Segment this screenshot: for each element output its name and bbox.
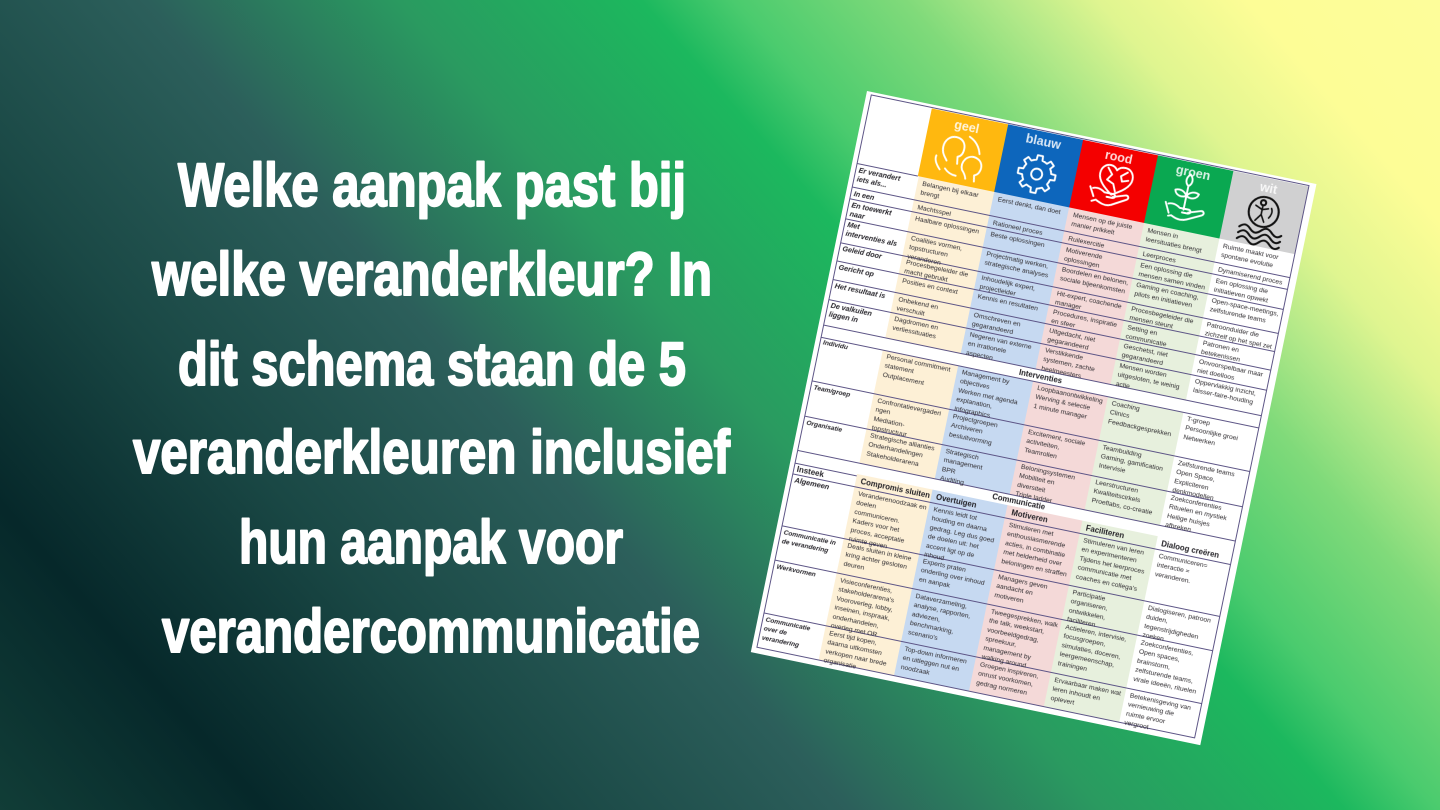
column: rood: spreekuur, (985, 636, 1017, 649)
row labels: Gericht op (838, 263, 875, 279)
column: groen: Feedbackgesprekken (1107, 418, 1172, 438)
column: rood: diversiteit (1017, 482, 1046, 494)
column: rood: onrust voorkomen, (977, 670, 1034, 689)
column: blauw: Omschreven en (973, 312, 1021, 328)
column: rood: Tweegesprekken, walk (990, 609, 1059, 629)
column: groen: Intervisie (1098, 462, 1126, 475)
column: blauw: Strategisch (945, 448, 979, 462)
column: geel (823, 181, 992, 678)
column: blauw: scenario's (907, 629, 939, 642)
column: rood: enthousiasmerende (1006, 531, 1066, 550)
column: rood: Werving & selectie (1035, 394, 1091, 412)
column: wit: Zoekconferenties, (1140, 640, 1194, 657)
column: wit: zelfsturende teams, (1134, 667, 1194, 685)
column: geel: overleg met OR (830, 622, 878, 639)
icon: heart on hand (1087, 162, 1135, 209)
column: blauw: Rationeel proces (992, 220, 1044, 237)
column: geel: Deals sluiten in kleine (847, 543, 912, 563)
column: wit: zelfsturende teams (1209, 306, 1267, 325)
column: rood: Hit-expert, coachende (1056, 290, 1122, 311)
column: geel: Outplacement (882, 372, 925, 387)
column: geel: Eerst tijd kopen, (828, 630, 877, 647)
column: geel: daarna uitkomsten (827, 639, 883, 657)
column: groen: Een oplossing die (1140, 262, 1193, 280)
column: groen: gegarandeerd (1121, 352, 1164, 367)
column: rood: Procedures, inspiratie (1052, 309, 1118, 329)
column: groen: Faciliteren (1085, 524, 1125, 540)
column: wit: spontane evolutie (1220, 252, 1274, 270)
column: geel: Compromis sluiten (860, 477, 931, 500)
row labels: In een (853, 189, 876, 202)
title: dit schema staan de 5 (178, 330, 686, 398)
column: groen: communicatie met (1077, 564, 1132, 582)
column: geel: ruimte geven (848, 536, 888, 550)
row labels: liggen in (828, 310, 859, 325)
column: rood: aandacht en (996, 583, 1034, 597)
column: rood: manier prikkelt (1070, 221, 1115, 237)
column: rood: motiveren (994, 592, 1024, 605)
column: rood: Uitgedacht, niet (1048, 327, 1096, 344)
column: blauw: Projectgroepen (952, 413, 998, 429)
column: blauw: explanation, (956, 396, 993, 410)
column: geel: Kaders voor het (852, 518, 900, 534)
column: rood: systemen, zachte (1043, 356, 1096, 374)
column: groen: communicatie (1125, 333, 1167, 349)
column: rood: oplossingen (1063, 256, 1100, 270)
column: groen: ontwikkelen, (1068, 607, 1106, 622)
column: geel: Onbekend en (898, 296, 939, 311)
column: blauw: houding en daarna (931, 515, 988, 534)
column: groen: focusgroepen, (1063, 633, 1106, 649)
row labels: iets als... (856, 175, 888, 190)
column: groen: trainingen (1057, 660, 1088, 673)
column: blauw: onderling over inhoud (920, 567, 985, 587)
column: wit: Open-space-meetings, (1211, 297, 1279, 318)
column: groen: Ervaarbaar maken wat (1054, 677, 1122, 697)
panel: colour header row: geel (953, 118, 980, 136)
column: wit: Patroonduider die (1206, 321, 1260, 339)
column: rood: Ruilexercitie (1067, 235, 1105, 250)
column: rood: acties, in combinatie (1004, 540, 1066, 559)
column: geel: inseinen, inspraak, (834, 604, 890, 623)
title: veranderkleuren inclusief (133, 418, 731, 486)
column: groen: Leerproces (1142, 251, 1177, 265)
column: geel: verkopen naar brede (825, 648, 887, 668)
title (133, 151, 731, 665)
column: geel: organisatie (823, 657, 857, 671)
column: blauw: Eerst denkt, dan doet (997, 196, 1061, 216)
column: rood: gegarandeerd (1047, 337, 1089, 352)
column: wit: Heilige huisjes (1166, 513, 1211, 528)
column: groen: en experimenteren (1081, 546, 1137, 565)
icon: two heads (932, 131, 987, 182)
column: rood: walking around (980, 653, 1027, 670)
column: blauw (900, 196, 1063, 684)
column: wit: Netwerken (1183, 434, 1216, 447)
column: geel: veranderen (907, 253, 942, 267)
column: rood: Groepen inspireren, (979, 661, 1039, 680)
column: wit: Open spaces, (1138, 649, 1181, 664)
icon: gear (1014, 152, 1059, 196)
column: rood: en sfeer (1050, 318, 1076, 330)
column: blauw: en aanpak (918, 576, 951, 590)
title: Welke aanpak past bij (178, 151, 686, 219)
column: rood: Motiveren (1011, 508, 1049, 524)
column backgrounds (819, 175, 1220, 722)
column: wit: Zelfsturende teams (1177, 460, 1235, 478)
column: wit: Persoonlijke groei (1185, 425, 1239, 443)
column: groen: Leerstructuren (1095, 479, 1139, 495)
row labels: Met (847, 220, 861, 231)
column: blauw: management (943, 457, 983, 472)
column: blauw: Kennis leidt tot (933, 506, 978, 522)
row labels: verandering (761, 635, 800, 649)
column: geel: proces, acceptatie (850, 527, 905, 545)
column: groen: Participatie (1072, 589, 1106, 603)
row labels: Communicatie in (783, 529, 836, 547)
column: groen: Coaching (1111, 400, 1140, 413)
column: wit: zichzelf op het spel zet (1204, 330, 1272, 351)
column: blauw: noodzaak (900, 664, 931, 677)
column: geel: stakeholderarena's (838, 586, 895, 605)
panel: colour header row: wit (1258, 180, 1279, 197)
column: geel: Strategische allianties (869, 432, 935, 453)
column: rood: Excitement, sociale (1027, 429, 1086, 447)
column: rood: gedrag normeren (976, 679, 1028, 697)
heading: Interventies: Interventies (1018, 368, 1064, 386)
row labels: Er verandert (858, 166, 901, 183)
icon: plant on hand (1163, 171, 1211, 224)
column: groen: coaches en collega's (1075, 573, 1138, 593)
column: geel: Procesbegeleider die (905, 259, 969, 279)
column: wit: Dynamiserend proces (1217, 266, 1284, 287)
column: groen: uitgesloten, te weinig (1117, 371, 1180, 391)
column: wit: virale ideeën, rituelen (1133, 676, 1197, 696)
column: groen: simulaties, doceren, (1061, 642, 1121, 661)
column: blauw: gedrag. Leg dus goed (929, 524, 995, 544)
column: rood: Beloningsystemen (1020, 464, 1076, 482)
column: blauw: Negeren van externe (969, 331, 1032, 351)
column: rood: sociale bijeenkomsten (1059, 275, 1126, 296)
column: blauw: infographics (954, 405, 991, 420)
column: wit: Ruimte maakt voor (1222, 243, 1279, 261)
column: blauw: Beste oplossingen (990, 231, 1045, 249)
row labels: Het resultaat is (834, 281, 886, 300)
column: groen: Kwaliteitscirkels (1093, 488, 1141, 505)
column: blauw: aspecten (965, 349, 994, 362)
column: geel: Haalbare oplossingen (914, 215, 980, 236)
column: rood: voorbeeldgedrag, (986, 627, 1039, 644)
column: wit: betekenissen (1200, 349, 1241, 364)
column: groen: Setting en (1127, 324, 1158, 337)
column: rood: Teamrollen (1024, 447, 1058, 460)
column: groen: Procesbegeleider die (1131, 306, 1194, 325)
column: wit: brainstorm, (1136, 658, 1171, 671)
column: rood: Triple ladder (1015, 491, 1053, 505)
column: rood: manager (1054, 299, 1083, 312)
column: geel: statement (884, 363, 914, 375)
row labels: Communicatie (765, 617, 811, 633)
column: rood: beloningen en straffen (1001, 558, 1068, 578)
panel: colour header row: groen (1175, 162, 1212, 183)
column: blauw: Management by (961, 369, 1010, 386)
column: blauw: Werken met agenda (957, 387, 1018, 406)
column: rood: met helderheid over (1003, 549, 1063, 568)
column: wit: Rituelen en mystiek (1168, 504, 1228, 523)
column: wit: Onvoorspelbaar maar (1198, 359, 1264, 379)
panel: table grid lines (757, 95, 1309, 738)
column: groen: Teambuilding (1102, 444, 1142, 459)
column: wit: Patronen en (1202, 340, 1240, 354)
column: geel: macht gebruikt (903, 268, 948, 284)
column: rood: Mensen op de juiste (1072, 212, 1133, 231)
column: geel: kring achter gesloten (845, 552, 908, 571)
column: groen: Clinics (1109, 409, 1131, 420)
column: rood: heelmeesters (1041, 365, 1082, 380)
column: wit: vergroot (1123, 719, 1149, 731)
column: geel: Veranderenoodzaak en (857, 491, 927, 512)
column: blauw: benchmarking, (909, 620, 954, 636)
title: welke veranderkleur? In (151, 240, 712, 308)
column: wit: vernieuwing die (1127, 701, 1175, 718)
panel: rotated schema document (751, 91, 1316, 745)
row labels: Team/groep (813, 384, 851, 399)
column: geel: verliessituaties (892, 325, 937, 341)
column: groen: leergemeenschap, (1059, 651, 1115, 669)
column: rood (975, 212, 1141, 700)
row labels: naar (849, 209, 867, 221)
column: groen: Proeflabs, co-creatie (1091, 497, 1153, 516)
column: blauw: de doelen uit: het (927, 533, 979, 551)
column: blauw: Auditing (939, 475, 965, 487)
column: groen: Geschetst, niet (1123, 343, 1168, 359)
column: rood: Managers geven (997, 574, 1048, 591)
column: blauw: projectleider (979, 284, 1017, 298)
column: wit: T-groep (1186, 416, 1211, 427)
column: blauw: Dataverzameling, (915, 593, 968, 610)
column: geel: topstructuur (871, 425, 908, 439)
column: blauw: adviezen, (911, 611, 941, 624)
column: wit: veranderen. (1154, 571, 1191, 585)
column: geel: Mediation- (873, 416, 905, 429)
row labels: De valkuilen (830, 301, 873, 318)
column: geel: Onderhandelingen (868, 441, 924, 460)
column: wit: ruimte ervoor (1125, 710, 1166, 726)
row labels (760, 165, 912, 652)
column: geel: topstructuren (908, 244, 949, 259)
column: groen: mensen samen vinden (1138, 271, 1206, 292)
column: geel: Vooroverleg, lobby, (836, 595, 893, 614)
column: rood: activiteiten, (1026, 438, 1060, 452)
panel: colour header row: blauw (1025, 131, 1062, 152)
panel: colour header row: rood (1104, 148, 1134, 167)
column: wit: duiden, (1145, 614, 1169, 625)
column: groen: Mensen in (1147, 227, 1179, 241)
column: blauw: Experts praten (922, 558, 966, 574)
column: geel: ngen (875, 407, 891, 417)
column: blauw: inhoud (923, 551, 945, 562)
row labels: interventies als (845, 229, 898, 248)
title: verandercommunicatie (162, 597, 700, 665)
column: wit: denkmodellen (1172, 487, 1214, 502)
column: wit: Zoekconferenties (1170, 495, 1222, 512)
column: blauw: accent ligt op de (925, 542, 975, 559)
column: wit: tegenstrijdigheden (1144, 623, 1199, 641)
column: geel: onderhandelen, (832, 613, 879, 630)
column: blauw: Archiveren (950, 422, 983, 436)
column: groen: leren inhoudt en (1052, 686, 1101, 703)
column: blauw: besluitvorming (948, 431, 993, 447)
row labels: Individu (822, 339, 848, 351)
column: groen: pilots en initiatieven (1134, 291, 1193, 310)
column: blauw: Kennis en resultaten (977, 293, 1039, 313)
row labels: Insteek (796, 465, 825, 479)
column: geel: Posities en context (901, 278, 958, 296)
column: wit: Dialoog creëren (1160, 539, 1220, 560)
panel: colour header row (918, 109, 1309, 254)
column: groen: organiseren, (1070, 598, 1108, 613)
column: geel: Visieconferenties, (839, 577, 893, 595)
row labels: Organisatie (806, 420, 843, 434)
column: blauw: Overtuigen (935, 493, 978, 510)
title: hun aanpak voor (239, 508, 623, 576)
column: groen: Tijdens het leerproces (1079, 555, 1146, 576)
column: rood: Mobiliteit en (1018, 473, 1055, 487)
column: geel: Machtsspel (917, 204, 952, 218)
column: wit: Dialogiseren, patroon (1147, 605, 1212, 625)
column: geel: doelen (856, 500, 877, 511)
column: groen: oplevert (1050, 695, 1075, 707)
column: blauw: objectives (959, 378, 991, 391)
column: blauw: Top-down informeren (904, 646, 967, 666)
column: rood: Verstikkende (1044, 347, 1084, 362)
column: blauw: Inhoudelijk expert, (981, 275, 1036, 293)
column: blauw: en uitleggen nut en (902, 655, 960, 673)
column: geel: communiceren. (854, 509, 900, 525)
column: wit: Communiceren= (1158, 553, 1208, 570)
column: blauw: strategische analyses (984, 260, 1049, 280)
row labels: En toewerkt (851, 200, 892, 217)
heading: Communicatie: Communicatie (991, 492, 1047, 512)
column: rood: the talk, weekstart, (988, 618, 1045, 636)
column: blauw: BPR (941, 466, 956, 476)
column: geel: Stakeholderarena (866, 450, 920, 468)
column: groen: faciliteren (1066, 616, 1096, 629)
column: wit: interactie = (1156, 562, 1190, 576)
column: rood: Boordelen en belonen, (1061, 266, 1129, 287)
column: wit: zoeken (1142, 632, 1165, 643)
row labels: over de (763, 626, 788, 637)
column: rood: Loopbaanontwikkeling (1037, 385, 1103, 405)
column: wit: initiatieven opwekt (1213, 287, 1269, 305)
row labels: Werkvormen (776, 564, 816, 579)
column: rood: Motiverende (1065, 247, 1103, 261)
column: geel: Personal commitment (886, 354, 951, 374)
column: rood: 1 minute manager (1033, 403, 1088, 421)
column: geel: Belangen bij elkaar (922, 181, 979, 199)
column: wit: Een oplossing die (1215, 278, 1269, 295)
column: groen: leersituaties brengt (1145, 236, 1202, 255)
column: geel: Coalities vormen, (910, 235, 963, 252)
column: geel: verschuilt (896, 305, 925, 318)
column: geel: Dagdromen en (894, 316, 939, 332)
column: groen: Actieleren, intervisie, (1065, 624, 1127, 643)
column: groen: Gaming, gamification (1100, 453, 1164, 473)
column: blauw: gegarandeerd (971, 321, 1014, 336)
row labels: Geleid door (842, 244, 884, 261)
column: wit: niet doelloos (1196, 368, 1236, 382)
column: wit: afbreken (1164, 522, 1192, 534)
column: groen (1050, 227, 1215, 716)
column: wit: Expliciteren (1174, 478, 1209, 492)
column: blauw: Projectmatig werken, (986, 251, 1049, 270)
column: wit: Betekenisgeving van (1129, 692, 1192, 712)
column: groen: Stimuleren van leren (1083, 537, 1145, 557)
row labels: de verandering (781, 538, 829, 555)
column: groen: Mensen worden (1119, 362, 1167, 379)
column: rood: management by (983, 645, 1032, 661)
column: blauw: en irrationele (967, 340, 1007, 355)
column: geel: brengt (920, 190, 940, 200)
icon: figure in circle above waves (1236, 193, 1288, 250)
column: geel: deuren (843, 561, 865, 572)
column: wit (1123, 243, 1291, 740)
row labels: Algemeen (793, 475, 831, 492)
column: wit: Open Space, (1175, 469, 1216, 484)
column: wit: Oppervlakkig inzicht, (1194, 378, 1257, 398)
column: groen: actie (1115, 381, 1131, 390)
column: geel: Confrontatievergaderi (877, 398, 942, 418)
column: wit: laisser-faire-houding (1192, 387, 1254, 406)
column: blauw: analyse, rapporten, (913, 602, 971, 621)
column: groen: Gaming en coaching, (1136, 282, 1199, 301)
column: rood: Stimuleren met (1008, 522, 1054, 538)
column: groen: mensen steunt (1129, 315, 1174, 331)
